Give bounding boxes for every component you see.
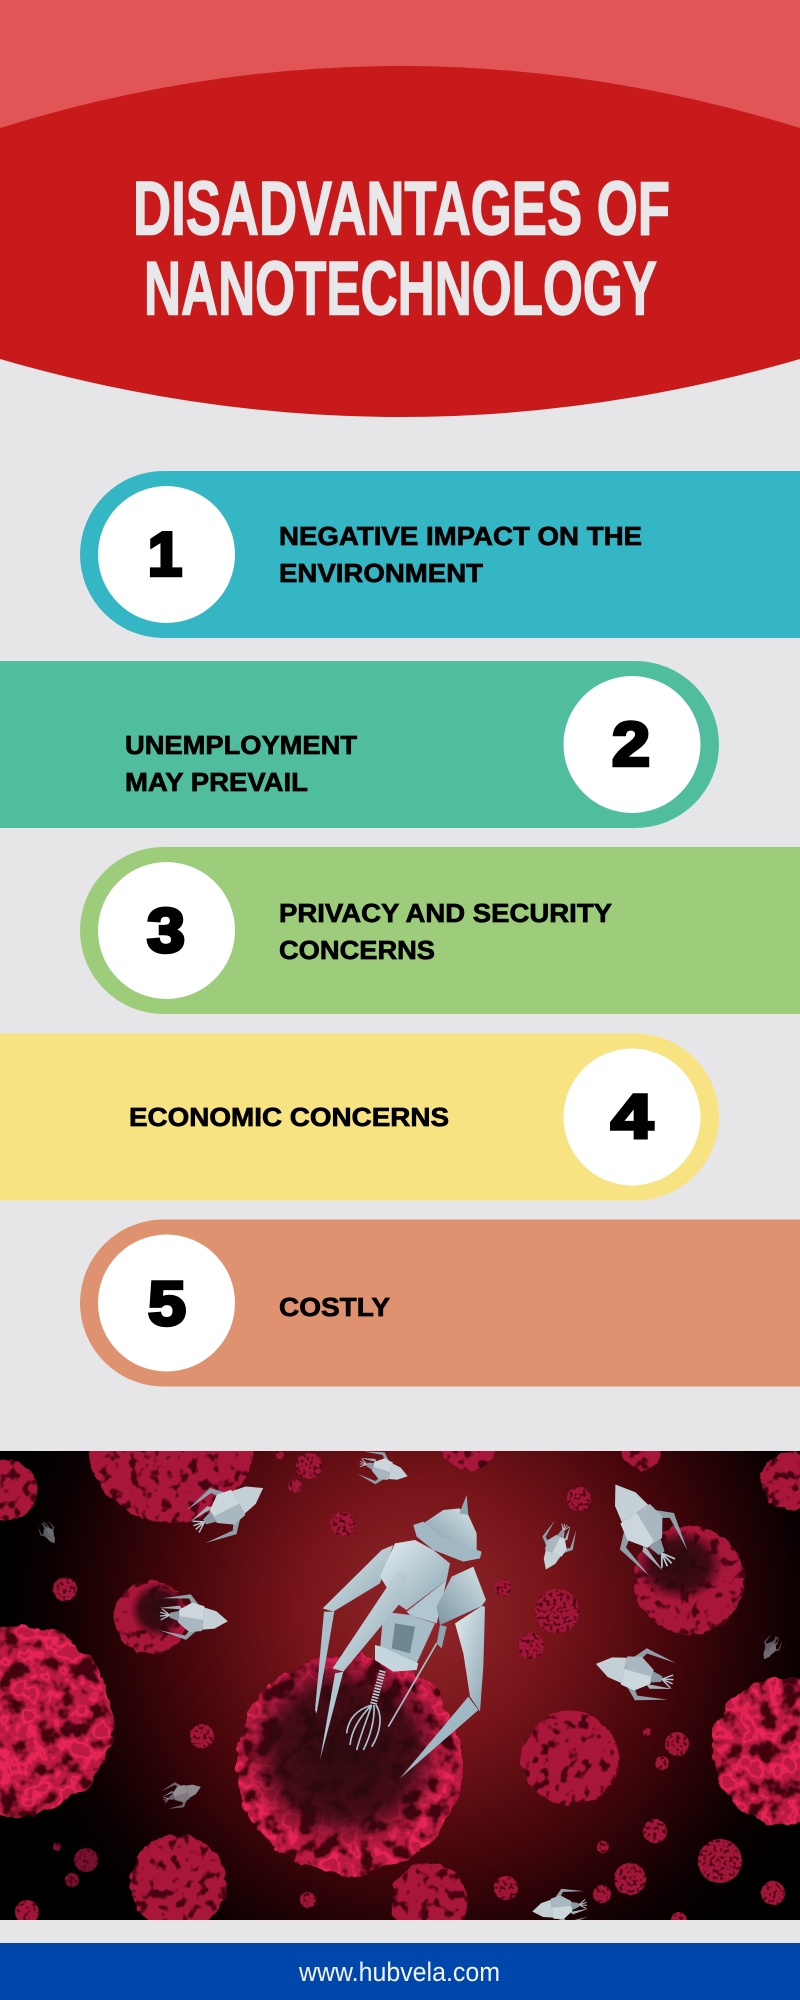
number badge 2	[564, 676, 700, 813]
number badge 2: 2	[612, 710, 650, 780]
item 4: economic: ECONOMIC CONCERNS	[129, 1102, 449, 1132]
item 1: negative impact: NEGATIVE IMPACT ON THE	[279, 521, 642, 551]
number badge 1: 1	[148, 520, 182, 590]
small nanobots	[35, 1446, 785, 1930]
item 1: negative impact	[80, 471, 800, 638]
number badge 4	[564, 1048, 700, 1186]
item 3: privacy: CONCERNS	[279, 935, 435, 965]
item 5: costly	[80, 1220, 800, 1386]
number badge 3	[98, 862, 235, 999]
dark cell cores	[130, 1529, 724, 1850]
item 3: privacy	[80, 847, 800, 1014]
item 5: costly: COSTLY	[279, 1292, 390, 1322]
item 1: negative impact: ENVIRONMENT	[279, 558, 483, 588]
photo: nanobots attacking cells	[0, 1451, 800, 1920]
main nanobot	[315, 1495, 486, 1778]
number badge 5	[98, 1234, 235, 1372]
website url: www.hubvela.com	[298, 1957, 500, 1987]
header band	[0, 0, 800, 417]
number badge 3: 3	[147, 897, 185, 966]
medium cells	[0, 1451, 800, 1920]
large cells	[0, 1625, 800, 1875]
title	[133, 166, 670, 332]
item 2: unemployment: MAY PREVAIL	[125, 767, 308, 797]
small cells	[15, 1451, 785, 1928]
footer bar	[0, 1943, 800, 2000]
number badge 4: 4	[611, 1082, 654, 1152]
item 3: privacy: PRIVACY AND SECURITY	[279, 898, 612, 928]
item 2: unemployment	[0, 661, 719, 828]
number badge 5: 5	[148, 1270, 186, 1339]
item 4: economic	[0, 1034, 719, 1200]
number badge 1	[98, 486, 235, 623]
item 2: unemployment: UNEMPLOYMENT	[125, 730, 357, 760]
